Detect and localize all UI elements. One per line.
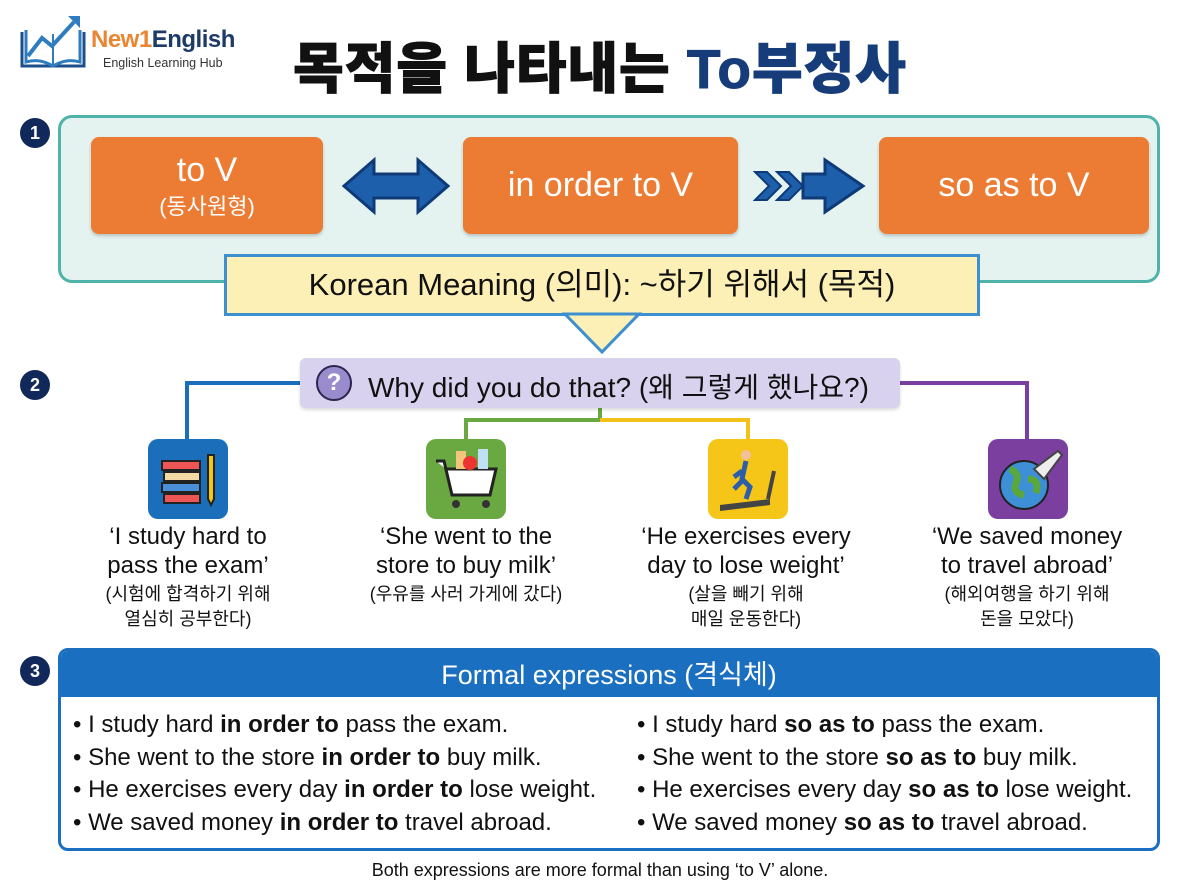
box: to V (91, 137, 323, 234)
box: so as to V (879, 137, 1149, 234)
number 3: 3 (30, 661, 40, 681)
list: in order to (73, 711, 596, 836)
caption 4: ‘We saved money (932, 523, 1122, 550)
meaning box: Korean Meaning (의미): ~하기 위해서 (목적) (309, 267, 895, 302)
caption 3: (살을 빼기 위해 (688, 584, 804, 604)
caption 2: (우유를 사러 가게에 갔다) (370, 584, 562, 604)
title: 목적을 나타내는 To부정사 (293, 38, 907, 100)
icon: books (148, 439, 228, 519)
header (61, 651, 1157, 697)
number 3 (20, 656, 50, 686)
arrow: down (562, 312, 642, 354)
footer note: Both expressions are more formal than using ‘to V’ alone. (372, 860, 828, 880)
list: so as to (637, 711, 1132, 836)
number 1: 1 (30, 123, 40, 143)
icon: treadmill (708, 439, 788, 519)
list: so as to: • We saved money so as to travel abroad. (637, 808, 1088, 836)
arrow: chevrons (753, 157, 866, 215)
arrow: double (342, 156, 450, 216)
caption 1 (105, 523, 271, 629)
caption 4: (해외여행을 하기 위해 (944, 584, 1110, 604)
caption 3 (641, 523, 851, 629)
logo (20, 16, 235, 70)
caption 2: ‘She went to the (380, 523, 552, 550)
number 2 (20, 370, 50, 400)
panel 1: equivalent expressions (58, 115, 1160, 283)
caption 1: ‘I study hard to (109, 523, 267, 550)
list: in order to: • I study hard in order to pass the exam. (73, 711, 508, 738)
number 1 (20, 118, 50, 148)
caption 1: (시험에 합격하기 위해 (105, 584, 271, 604)
header: Formal expressions (격식체) (441, 660, 777, 690)
list: in order to: • She went to the store in order to buy milk. (73, 744, 542, 770)
list: in order to: • He exercises every day in order to lose weight. (73, 776, 596, 803)
panel 3: formal expressions (58, 648, 1160, 851)
caption 4: 돈을 모았다) (980, 609, 1074, 629)
caption 1: pass the exam’ (107, 552, 269, 579)
icon: shopping cart (426, 439, 506, 519)
caption 2 (370, 523, 562, 604)
box: in order to V (463, 137, 738, 234)
meaning box (224, 254, 980, 316)
number 2: 2 (30, 375, 40, 395)
caption 4 (932, 523, 1122, 629)
icon: question: ? (327, 369, 341, 396)
icon: question (316, 365, 352, 401)
question box: Why did you do that? (왜 그렇게 했나요?) (368, 372, 869, 403)
logo: English Learning Hub (103, 56, 223, 70)
list: so as to: • He exercises every day so as to lose weight. (637, 776, 1132, 803)
icon: globe plane (988, 439, 1068, 519)
box: so as to V: so as to V (938, 166, 1090, 204)
list: in order to: • We saved money in order to travel abroad. (73, 808, 552, 836)
connector lines (185, 381, 1029, 439)
list: so as to: • She went to the store so as to buy milk. (637, 744, 1078, 770)
box: to V: (동사원형) (159, 194, 255, 218)
caption 1: 열심히 공부한다) (125, 609, 251, 629)
logo: New1English (91, 26, 235, 53)
box: in order to V: in order to V (508, 166, 693, 204)
caption 4: to travel abroad’ (941, 552, 1113, 579)
caption 3: 매일 운동한다) (691, 609, 801, 629)
box: to V: to V (177, 150, 237, 188)
list: so as to: • I study hard so as to pass the exam. (637, 711, 1044, 738)
caption 3: ‘He exercises every (641, 523, 851, 550)
caption 2: store to buy milk’ (376, 552, 556, 579)
question box (300, 358, 900, 408)
caption 3: day to lose weight’ (647, 552, 845, 579)
